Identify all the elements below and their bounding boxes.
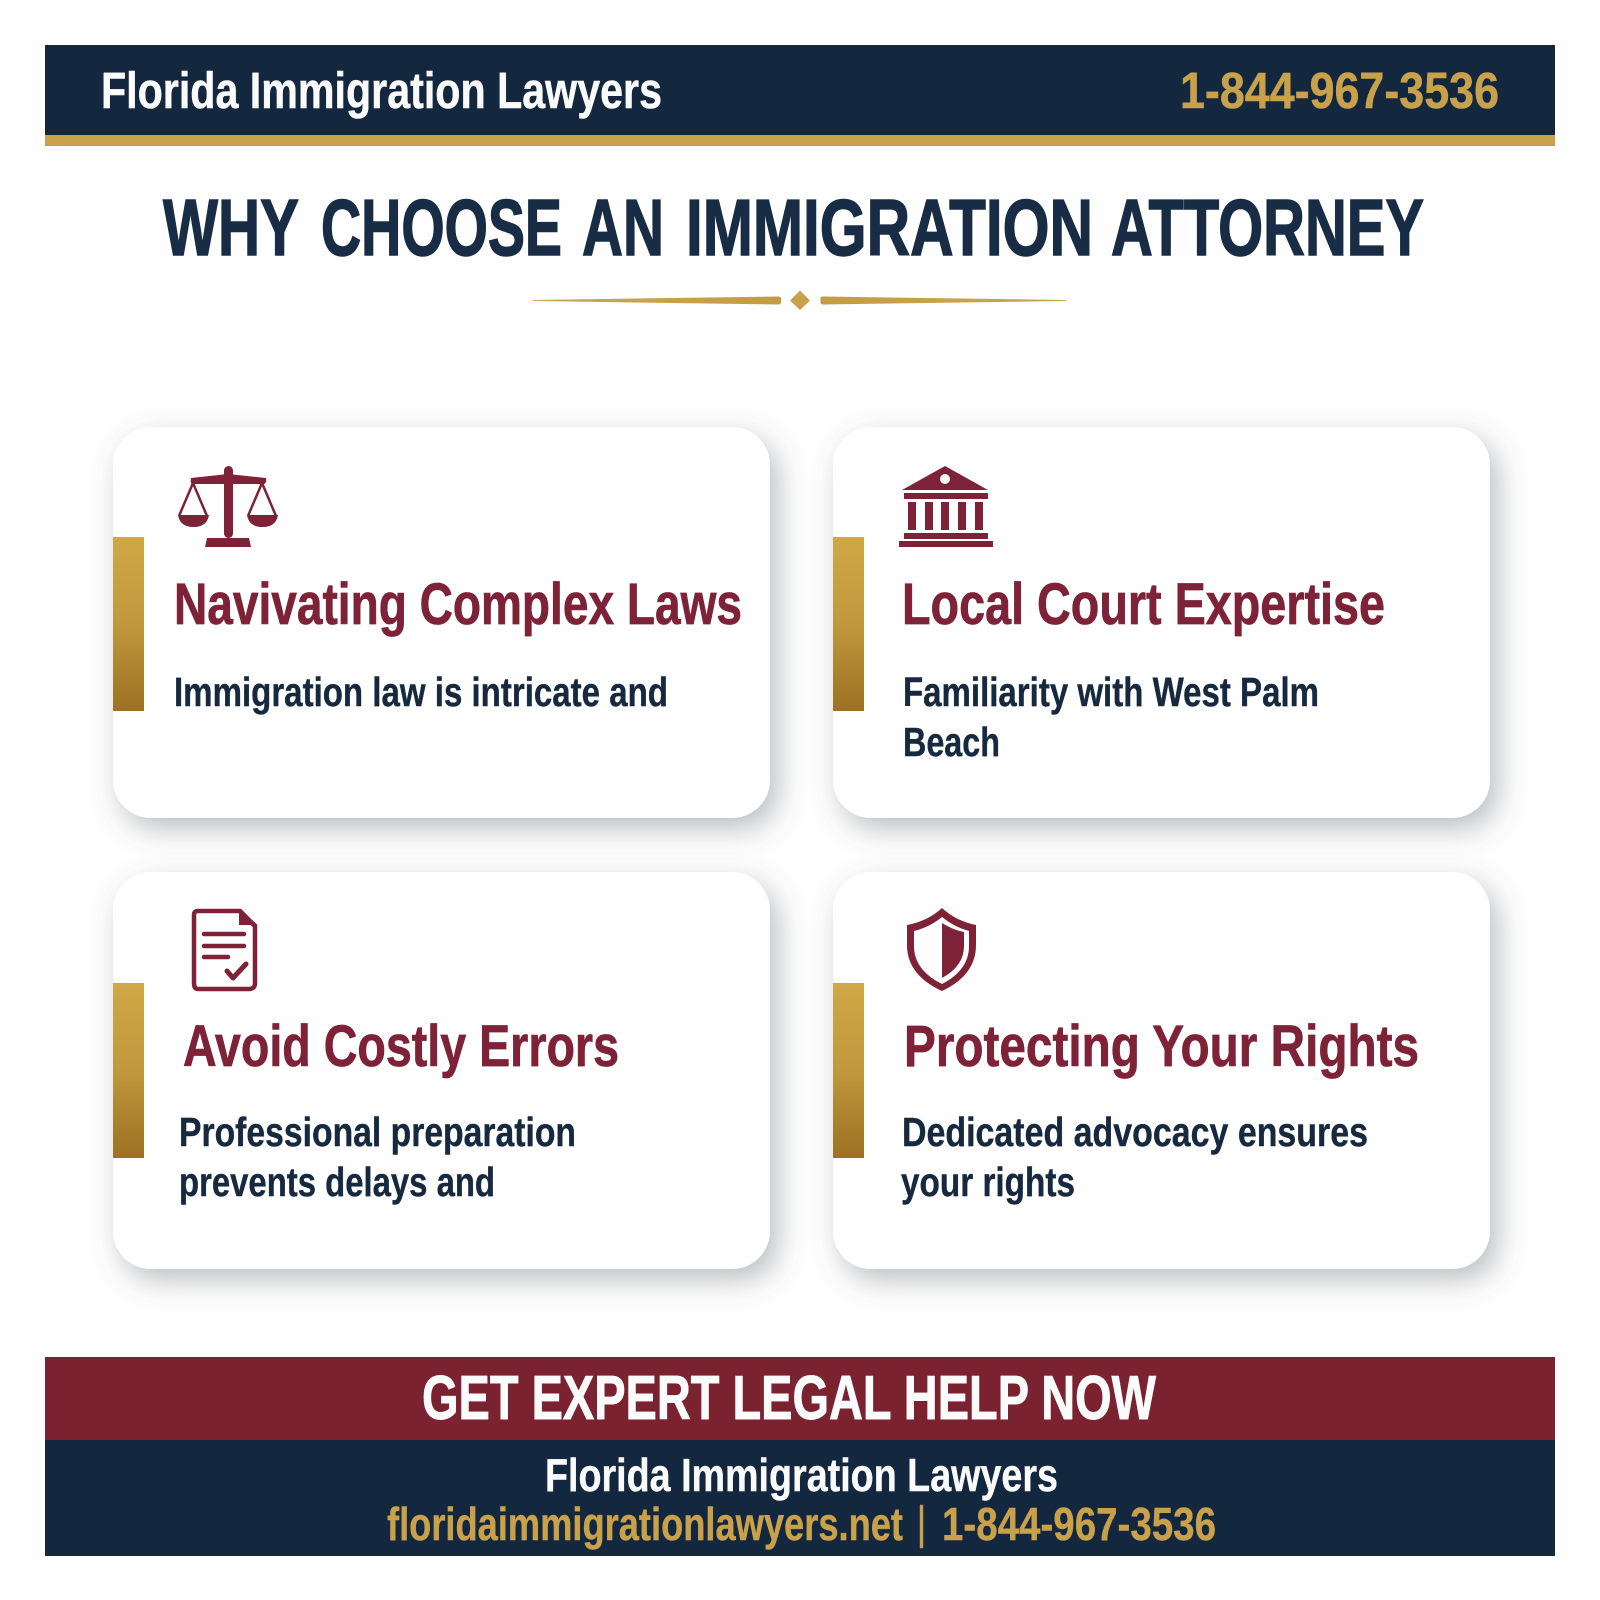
call to action banner bbox=[45, 1357, 1555, 1440]
website and phone: 1-844-967-3536 bbox=[942, 1498, 1216, 1550]
title divider with diamond bbox=[533, 290, 1066, 310]
card body text: Professional preparation bbox=[179, 1109, 576, 1155]
card body text bbox=[179, 1109, 576, 1205]
call to action banner: GET EXPERT LEGAL HELP NOW bbox=[422, 1364, 1156, 1433]
card body text: Beach bbox=[903, 719, 1000, 765]
top header bar bbox=[45, 45, 1555, 146]
card body text: prevents delays and bbox=[179, 1159, 495, 1205]
phone number: 1-844-967-3536 bbox=[1180, 62, 1499, 119]
card body text: Dedicated advocacy ensures bbox=[902, 1109, 1368, 1155]
card body text bbox=[903, 669, 1319, 765]
main title: WHY bbox=[163, 183, 299, 272]
gold accent bar bbox=[833, 537, 864, 711]
panel: local court expertise bbox=[833, 427, 1490, 818]
gold accent bar bbox=[113, 537, 144, 711]
panel: protecting your rights bbox=[833, 872, 1490, 1269]
main title bbox=[163, 183, 1424, 272]
gold accent bar bbox=[833, 983, 864, 1158]
panel: navigating complex laws bbox=[113, 427, 770, 818]
card body text: Immigration law is intricate and bbox=[174, 669, 668, 715]
footer firm name: Florida Immigration Lawyers bbox=[545, 1449, 1058, 1501]
gold accent bar bbox=[113, 983, 144, 1158]
card body text: your rights bbox=[901, 1159, 1075, 1205]
website and phone: floridaimmigrationlawyers.net bbox=[387, 1498, 903, 1550]
card heading: Protecting Your Rights bbox=[904, 1014, 1419, 1079]
main title: AN bbox=[582, 183, 664, 272]
icon: courthouse bbox=[899, 466, 993, 547]
main title: ATTORNEY bbox=[1111, 183, 1424, 272]
card body text bbox=[901, 1109, 1368, 1205]
icon: document with checkmark bbox=[194, 911, 255, 989]
panel: avoid costly errors bbox=[113, 872, 770, 1269]
card heading: Local Court Expertise bbox=[902, 572, 1385, 637]
footer contact block bbox=[45, 1440, 1555, 1556]
firm name: Florida Immigration Lawyers bbox=[101, 62, 662, 119]
main title: IMMIGRATION bbox=[686, 183, 1093, 272]
card heading: Avoid Costly Errors bbox=[183, 1014, 619, 1079]
card heading: Navivating Complex Laws bbox=[174, 572, 742, 637]
card body text: Familiarity with West Palm bbox=[903, 669, 1319, 715]
icon: shield bbox=[907, 908, 976, 991]
main title: CHOOSE bbox=[321, 183, 562, 272]
icon: scales of justice bbox=[178, 466, 278, 547]
